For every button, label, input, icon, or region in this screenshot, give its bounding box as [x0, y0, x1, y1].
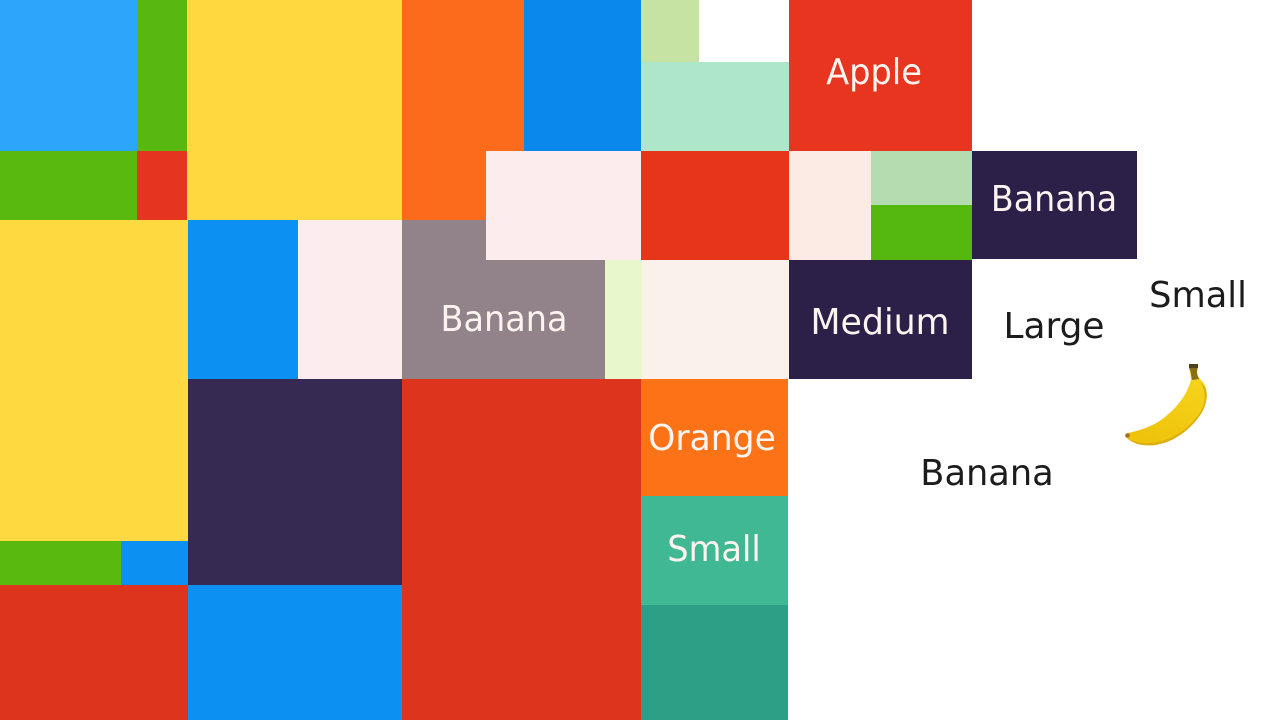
panel: Orange cell: Orange — [648, 418, 775, 459]
panel: Small green cell: Small — [667, 529, 760, 570]
icon: banana — [1125, 364, 1207, 446]
panel: Medium cell: Medium — [810, 302, 950, 343]
label: Banana: Banana — [920, 453, 1053, 494]
panel: Banana grey cell — [402, 220, 605, 379]
panel: Small green cell — [641, 496, 788, 605]
panel: Banana dark cell — [972, 151, 1137, 259]
panel: Banana grey cell: Banana — [440, 299, 567, 340]
panel: Medium cell — [789, 260, 972, 379]
panel: Banana dark cell: Banana — [991, 179, 1117, 220]
label: Large: Large — [1003, 306, 1104, 347]
panel: Orange cell — [641, 379, 788, 496]
panel: Apple cell — [789, 0, 972, 151]
panel: Apple cell: Apple — [826, 52, 921, 93]
label: Small: Small — [1149, 275, 1247, 316]
